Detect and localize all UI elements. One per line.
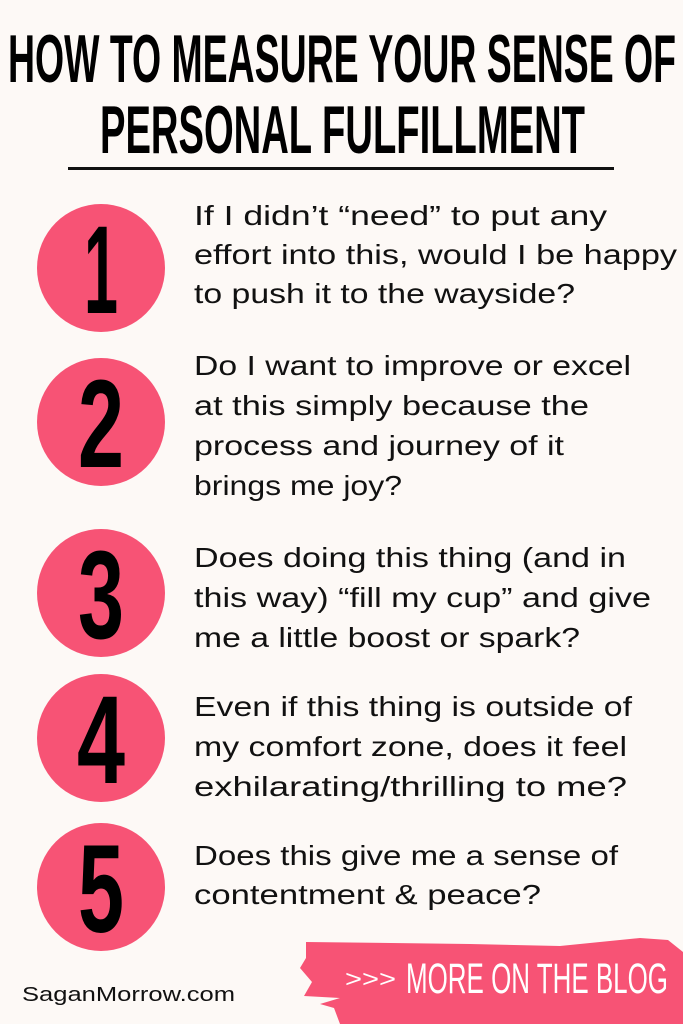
icon: number 5 circle [37, 820, 165, 959]
text: question 4: exhilarating/thrilling to me? [194, 771, 627, 802]
item 4 [37, 671, 632, 810]
item 3 [37, 526, 651, 665]
icon: number 2 circle: 2 [78, 355, 124, 494]
text: question 5: Does this give me a sense of [194, 840, 618, 871]
text: question 2: process and journey of it [194, 430, 564, 461]
text: question 4: Even if this thing is outside of [194, 691, 632, 722]
callout: more on the blog button [300, 938, 683, 1024]
icon: number 4 circle: 4 [77, 671, 125, 810]
text: question 1: to push it to the wayside? [194, 278, 575, 309]
text: question 3: this way) “fill my cup” and give [194, 582, 651, 613]
item 5 [37, 820, 618, 959]
text: question 5 [194, 840, 618, 910]
text: question 3 [194, 542, 651, 653]
item 1 [37, 200, 677, 340]
text: question 5: contentment & peace? [194, 879, 541, 910]
icon: number 1 circle [37, 201, 165, 340]
text: question 2: at this simply because the [194, 390, 589, 421]
text: question 1: effort into this, would I be happy [194, 239, 677, 270]
text: question 3: me a little boost or spark? [194, 622, 580, 653]
text: question 4: my comfort zone, does it feel [194, 731, 627, 762]
text: question 1 [194, 200, 677, 309]
icon: number 2 circle [37, 355, 165, 494]
icon: number 4 circle [37, 671, 165, 810]
text: question 2: Do I want to improve or excel [194, 350, 631, 381]
text: question 2 [194, 350, 631, 501]
title [8, 21, 676, 168]
item 2 [37, 350, 631, 501]
icon: number 3 circle [37, 526, 165, 665]
callout: more on the blog button: >>> [345, 966, 396, 993]
text: question 4 [194, 691, 632, 802]
text: question 1: If I didn’t “need” to put any [194, 200, 607, 231]
footer: website: SaganMorrow.com [22, 984, 235, 1006]
icon: number 1 circle: 1 [84, 201, 118, 340]
text: question 2: brings me joy? [194, 470, 402, 501]
text: question 3: Does doing this thing (and in [194, 542, 626, 573]
icon: number 3 circle: 3 [78, 526, 124, 665]
icon: number 5 circle: 5 [78, 820, 124, 959]
